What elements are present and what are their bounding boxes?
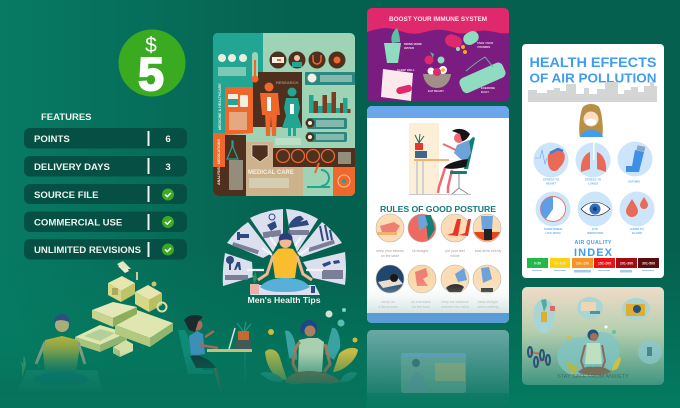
illustration: woman with laptop — [178, 315, 252, 392]
tip captions row 2: when walking — [477, 305, 499, 309]
icon row 1 captions: STRESS TO — [585, 178, 602, 182]
icons: organ circles — [276, 150, 334, 162]
light rays — [247, 237, 323, 270]
platform — [250, 285, 320, 295]
icon: lungs — [581, 142, 606, 172]
icons: service circles — [270, 52, 346, 68]
icon: sleeper — [622, 298, 650, 320]
panel: stay safe from anxiety — [522, 287, 664, 385]
row: delivery days — [24, 156, 187, 176]
icon: cursor — [117, 261, 131, 269]
icon row 1 captions: STRESS TO — [543, 178, 560, 182]
tip captions row 2: between the table — [441, 305, 469, 309]
tip captions row 2: a flat surface — [378, 305, 398, 309]
captions: DAILY — [481, 90, 489, 94]
tip artwork row 1 — [377, 215, 500, 241]
icon: thermometer — [252, 52, 258, 82]
row: source file: SOURCE FILE — [34, 190, 99, 201]
right block — [115, 310, 173, 347]
tip captions row 2: keep the distance — [441, 300, 469, 304]
middle block — [92, 302, 137, 327]
icon row 2 captions: LIFE SPAN — [546, 231, 560, 235]
tip captions row 1 — [376, 250, 502, 257]
tip captions row 1: sit straight — [412, 249, 428, 253]
price badge: 5 — [138, 48, 164, 100]
row: commercial use: COMMERCIAL USE — [34, 218, 123, 228]
illustration: isometric city — [75, 263, 173, 357]
captions — [397, 41, 495, 94]
captions: DRINK MORE — [404, 42, 422, 46]
rooftop details — [118, 263, 166, 312]
top cube — [108, 276, 135, 302]
fan icons — [226, 214, 340, 270]
row: unlimited revisions: UNLIMITED REVISIONS — [34, 245, 142, 256]
tip captions row 2: keep straight — [478, 300, 498, 304]
icon row 1 captions: ASTHMA — [628, 180, 641, 184]
small text blocks — [218, 67, 352, 190]
icon: orange molecule — [338, 175, 350, 187]
figure: female — [282, 88, 302, 136]
illustration: faded meditating woman — [260, 308, 358, 384]
index scale: 201-300 — [620, 262, 633, 266]
icon row 2 captions: HARM TO — [630, 227, 644, 231]
illustration: woman at desk — [409, 123, 475, 195]
icon: woman with mask — [579, 104, 603, 137]
illustration: faded meditating man — [17, 314, 103, 392]
index captions — [532, 270, 654, 272]
side labels: MEDICATIONS — [217, 139, 221, 164]
icon: flask — [227, 141, 238, 159]
tip captions row 2: do exercises — [411, 300, 431, 304]
row: points: POINTS — [34, 134, 70, 145]
tip captions row 1: put your feet — [445, 249, 465, 253]
captions: SLEEP WELL — [397, 68, 415, 72]
seated man — [258, 233, 312, 292]
icon: plant — [533, 299, 555, 333]
icon: blood drops — [626, 197, 648, 217]
caption: Men's Health Tips — [248, 296, 321, 305]
icon: eye — [581, 202, 610, 216]
icon: inhaler — [626, 145, 645, 172]
icon row 2 — [536, 192, 654, 226]
index scale — [527, 258, 659, 268]
features heading: FEATURES — [41, 112, 92, 123]
panel: boost your immune system — [367, 8, 509, 102]
panel: medical care infographic — [213, 33, 355, 196]
heading: RULES OF GOOD POSTURE — [380, 204, 496, 214]
icon row 1 captions: HEART — [546, 182, 556, 186]
captions: EXERCISE — [481, 86, 495, 90]
icon: phone circle — [638, 340, 662, 364]
icon: food bowl — [423, 52, 451, 88]
illustration: meditating woman — [557, 326, 621, 376]
row: unlimited revisions — [24, 239, 187, 260]
emblem shield — [252, 145, 268, 162]
index scale: 51-100 — [554, 262, 566, 266]
lower block — [75, 325, 127, 352]
icon: book — [577, 297, 603, 319]
row: commercial use — [24, 212, 187, 232]
icon: water glass — [384, 28, 401, 63]
illustration caption: STAY SAFE FROM ANXIETY — [557, 374, 629, 380]
icon row 1 captions — [543, 178, 641, 186]
captions: EAT READY — [428, 89, 444, 93]
icon row 2 captions: SHORTENED — [544, 227, 562, 231]
side labels — [218, 84, 221, 185]
air quality index heading: INDEX — [574, 247, 613, 259]
title: OF AIR POLLUTION — [530, 72, 656, 86]
cup — [311, 286, 315, 293]
icon row 2 captions: IRRITATION — [587, 231, 603, 235]
title — [530, 54, 656, 86]
icon: clock — [540, 196, 566, 222]
index scale: 101-150 — [576, 262, 589, 266]
title: HEALTH EFFECTS — [530, 54, 656, 70]
icon: jar — [228, 94, 248, 107]
icon: pillow and sleep mask — [381, 69, 413, 101]
icon: capsule — [445, 31, 479, 54]
icon: yoga mat — [458, 57, 507, 95]
row: delivery days: DELIVERY DAYS — [34, 162, 110, 173]
panel: reflected card — [367, 330, 509, 408]
captions: TAKE YOUR — [477, 41, 493, 45]
panel: health effects of air pollution — [522, 44, 664, 278]
index scale: 301-500 — [642, 262, 655, 266]
tip circles row 2 — [376, 265, 501, 293]
fan text lines — [225, 230, 343, 280]
icons: numbered circles — [218, 54, 247, 62]
icon: dumbbells — [528, 347, 550, 367]
icon row 2 captions — [544, 227, 644, 235]
icon row 2 captions: BLOOD — [632, 231, 642, 235]
price badge: $ — [145, 34, 157, 57]
air quality index heading: AIR QUALITY — [574, 240, 612, 246]
city skyline — [528, 82, 657, 102]
icon: heart — [535, 149, 565, 171]
row: points — [24, 128, 187, 148]
tip captions row 1: whole — [450, 254, 460, 258]
side labels: MEDICINE & HEALTHCARE — [218, 83, 222, 130]
panel: men's health tips — [223, 209, 346, 305]
heading: research: RESEARCH — [276, 80, 299, 85]
tip circles row 1 — [376, 214, 501, 242]
features table — [24, 128, 187, 260]
bar chart — [309, 92, 350, 113]
side labels: ANALYSIS — [217, 167, 221, 185]
row: delivery days: 3 — [165, 162, 171, 173]
fan segments — [223, 209, 346, 286]
heading: medical care: MEDICAL CARE — [248, 170, 294, 176]
price badge — [118, 30, 186, 100]
panel: rules of good posture — [367, 106, 509, 323]
title: BOOST YOUR IMMUNE SYSTEM — [389, 16, 487, 23]
row: points: 6 — [165, 134, 171, 145]
tip captions row 2: for the back — [412, 305, 430, 309]
tip captions row 1: keep your elbows — [376, 249, 404, 253]
icon row 1 — [534, 142, 652, 178]
plant pot — [250, 270, 259, 294]
tip captions row 1: on the table — [381, 254, 399, 258]
captions: WATER — [404, 46, 414, 50]
icon row 2 captions: EYE — [592, 227, 598, 231]
captions: VITAMINS — [477, 45, 490, 49]
icons: chart bullet circles — [306, 74, 316, 142]
bottom fade overlay — [0, 352, 366, 408]
icon row 1 captions: LUNGS — [588, 182, 598, 186]
row: source file — [24, 184, 187, 204]
index scale: 0-50 — [534, 262, 541, 266]
tip captions row 2: sleep on — [381, 300, 395, 304]
tip captions row 1: load arms evenly — [475, 249, 501, 253]
index scale: 151-200 — [598, 262, 611, 266]
truck — [113, 340, 133, 357]
tip captions row 2 — [378, 300, 499, 309]
tip artwork row 2 — [378, 267, 493, 292]
icon: microscope — [307, 163, 330, 187]
figure: male — [260, 82, 280, 136]
second cube — [135, 285, 162, 312]
air quality index heading — [574, 240, 613, 259]
